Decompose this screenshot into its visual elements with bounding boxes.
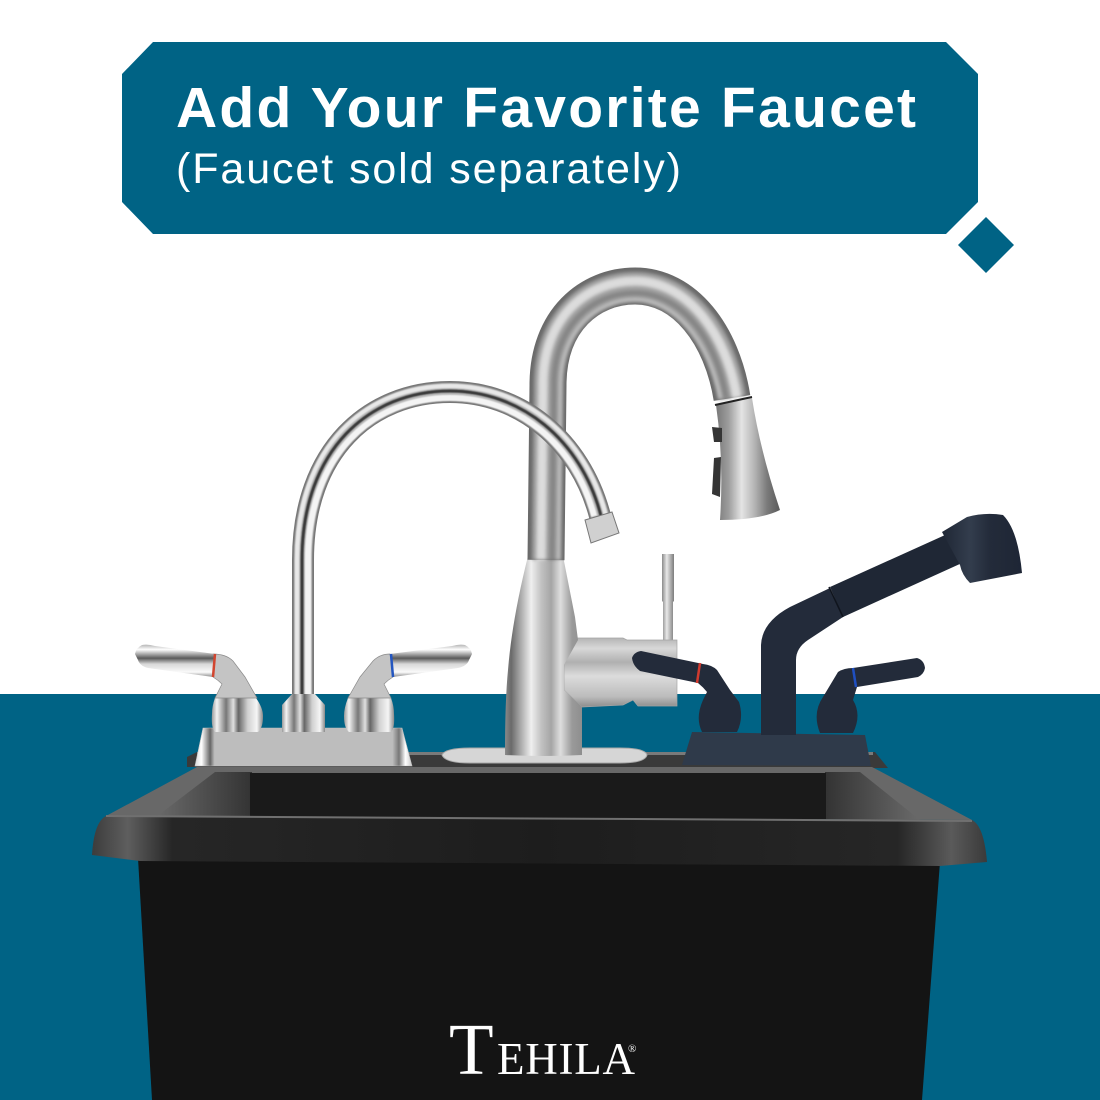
rim front face bbox=[92, 816, 987, 866]
left inner wall bbox=[156, 772, 252, 818]
left handle ball bbox=[212, 698, 263, 732]
subheading: (Faucet sold separately) bbox=[176, 145, 681, 193]
heading: Add Your Favorite Faucet bbox=[176, 76, 916, 140]
handle body bbox=[564, 638, 677, 707]
hot marker bbox=[697, 663, 700, 683]
background band bbox=[0, 694, 1100, 1100]
right handle ball bbox=[344, 698, 394, 732]
banner shape bbox=[122, 42, 978, 234]
faucet: chrome two-handle bbox=[135, 386, 619, 766]
pull-out hose section bbox=[830, 526, 965, 617]
basin back wall bbox=[250, 773, 826, 819]
rim highlight bbox=[106, 816, 972, 821]
spout base bbox=[282, 694, 325, 732]
gooseneck spout bbox=[297, 386, 606, 700]
left lever bbox=[135, 645, 215, 677]
cold marker bbox=[853, 668, 856, 687]
base plate bbox=[442, 748, 647, 763]
spout riser bbox=[761, 588, 843, 735]
hose seam bbox=[829, 587, 843, 617]
spray head collar bbox=[715, 397, 752, 405]
right inner wall bbox=[825, 772, 920, 820]
right lever bbox=[390, 645, 472, 677]
sink tub bbox=[92, 767, 987, 1100]
spray head buttons bbox=[712, 427, 722, 497]
spray head bbox=[942, 514, 1022, 583]
tub body bbox=[138, 858, 940, 1100]
hot marker bbox=[213, 654, 215, 677]
speech diamond bbox=[958, 217, 1014, 273]
banner bbox=[122, 42, 978, 234]
sink rear rim bbox=[187, 752, 888, 768]
deck plate bbox=[682, 732, 871, 766]
lever pin bbox=[662, 554, 674, 640]
brand logo: T bbox=[449, 1009, 494, 1090]
rim top surface bbox=[106, 767, 972, 820]
cold marker bbox=[391, 654, 393, 677]
right handle neck bbox=[348, 654, 393, 698]
right handle bbox=[817, 658, 925, 733]
faucet: matte navy pull-out bbox=[632, 514, 1022, 766]
aerator bbox=[585, 512, 619, 543]
faucet: brushed pull-down bbox=[442, 281, 780, 763]
brand logo bbox=[449, 1009, 636, 1090]
brand logo: ® bbox=[628, 1043, 636, 1055]
tapered body bbox=[505, 556, 582, 756]
gooseneck spout bbox=[541, 281, 737, 560]
left handle neck bbox=[213, 654, 257, 698]
spray head bbox=[716, 398, 780, 520]
deck plate bbox=[195, 728, 412, 766]
brand logo: EHILA bbox=[497, 1034, 636, 1084]
left handle bbox=[632, 651, 741, 732]
